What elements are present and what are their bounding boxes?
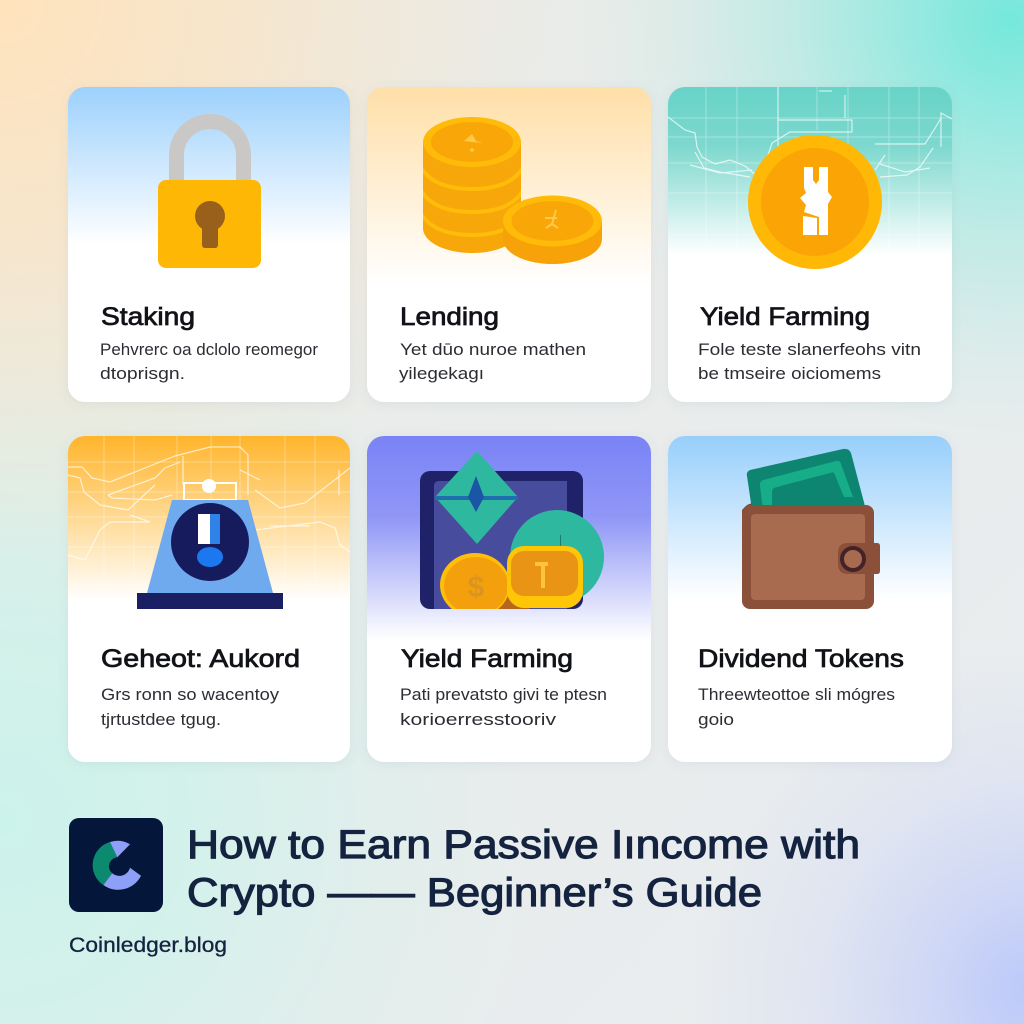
icon: crypto tablet and coins: $ <box>468 571 485 604</box>
icon: padlock <box>158 121 261 268</box>
heading: lending: Lending <box>400 303 499 331</box>
text: yield farming description <box>400 685 607 729</box>
icon: coin stacks <box>420 117 602 264</box>
text: yield farming description: Pati prevatsto givi te ptesn <box>400 685 607 704</box>
heading: geheot aukord: Geheot: Aukord <box>101 645 300 673</box>
heading: staking: Staking <box>101 303 195 331</box>
text: geheot aukord description: Grs ronn so wacentoy <box>101 685 280 704</box>
text: yield farming description: be tmseire oiciomems <box>698 364 881 383</box>
chart lines: map background <box>68 436 350 582</box>
text: staking description: Pehvrerc oa dclolo reomegor <box>100 340 318 359</box>
icon: vault with badge <box>137 479 283 609</box>
panel: staking <box>68 87 350 402</box>
text: dividend tokens description: goio <box>698 710 734 729</box>
text: geheot aukord description: tjrtustdee tgug. <box>101 710 221 729</box>
text: geheot aukord description <box>101 685 280 729</box>
text: dividend tokens description: Threewteottoe sli mógres <box>698 685 895 704</box>
title: How to Earn Passive Iıncome with <box>187 823 860 867</box>
panel: geheot aukord <box>68 436 350 762</box>
heading: yield farming: Yield Farming <box>401 645 573 673</box>
icon: crypto tablet and coins <box>420 451 604 617</box>
title <box>187 823 860 915</box>
panel: lending <box>367 87 651 402</box>
text: lending description <box>399 340 586 383</box>
title: Crypto —— Beginner’s Guide <box>187 871 762 915</box>
text: staking description <box>100 340 318 383</box>
text: yield farming description: Fole teste slanerfeohs vitn <box>698 340 921 359</box>
icon: coinledger logo <box>69 818 163 912</box>
chart lines: map background <box>668 87 952 250</box>
panel: dividend tokens <box>668 436 952 762</box>
heading: dividend tokens: Dividend Tokens <box>698 645 904 673</box>
text: staking description: dtoprisgn. <box>100 364 185 383</box>
text: lending description: Yet dūo nuroe mathen <box>400 340 586 359</box>
text: yield farming description <box>698 340 921 383</box>
text: lending description: yilegekagı <box>399 364 484 383</box>
icon: wallet <box>742 449 880 609</box>
text: site name: Coinledger.blog <box>69 934 227 957</box>
text: dividend tokens description <box>698 685 895 729</box>
heading: yield farming: Yield Farming <box>700 303 870 331</box>
panel: yield farming top <box>668 87 952 402</box>
panel: yield farming bottom <box>367 436 651 762</box>
text: yield farming description: korioerresstooriv <box>400 710 557 729</box>
icon: gold coin <box>748 135 882 269</box>
